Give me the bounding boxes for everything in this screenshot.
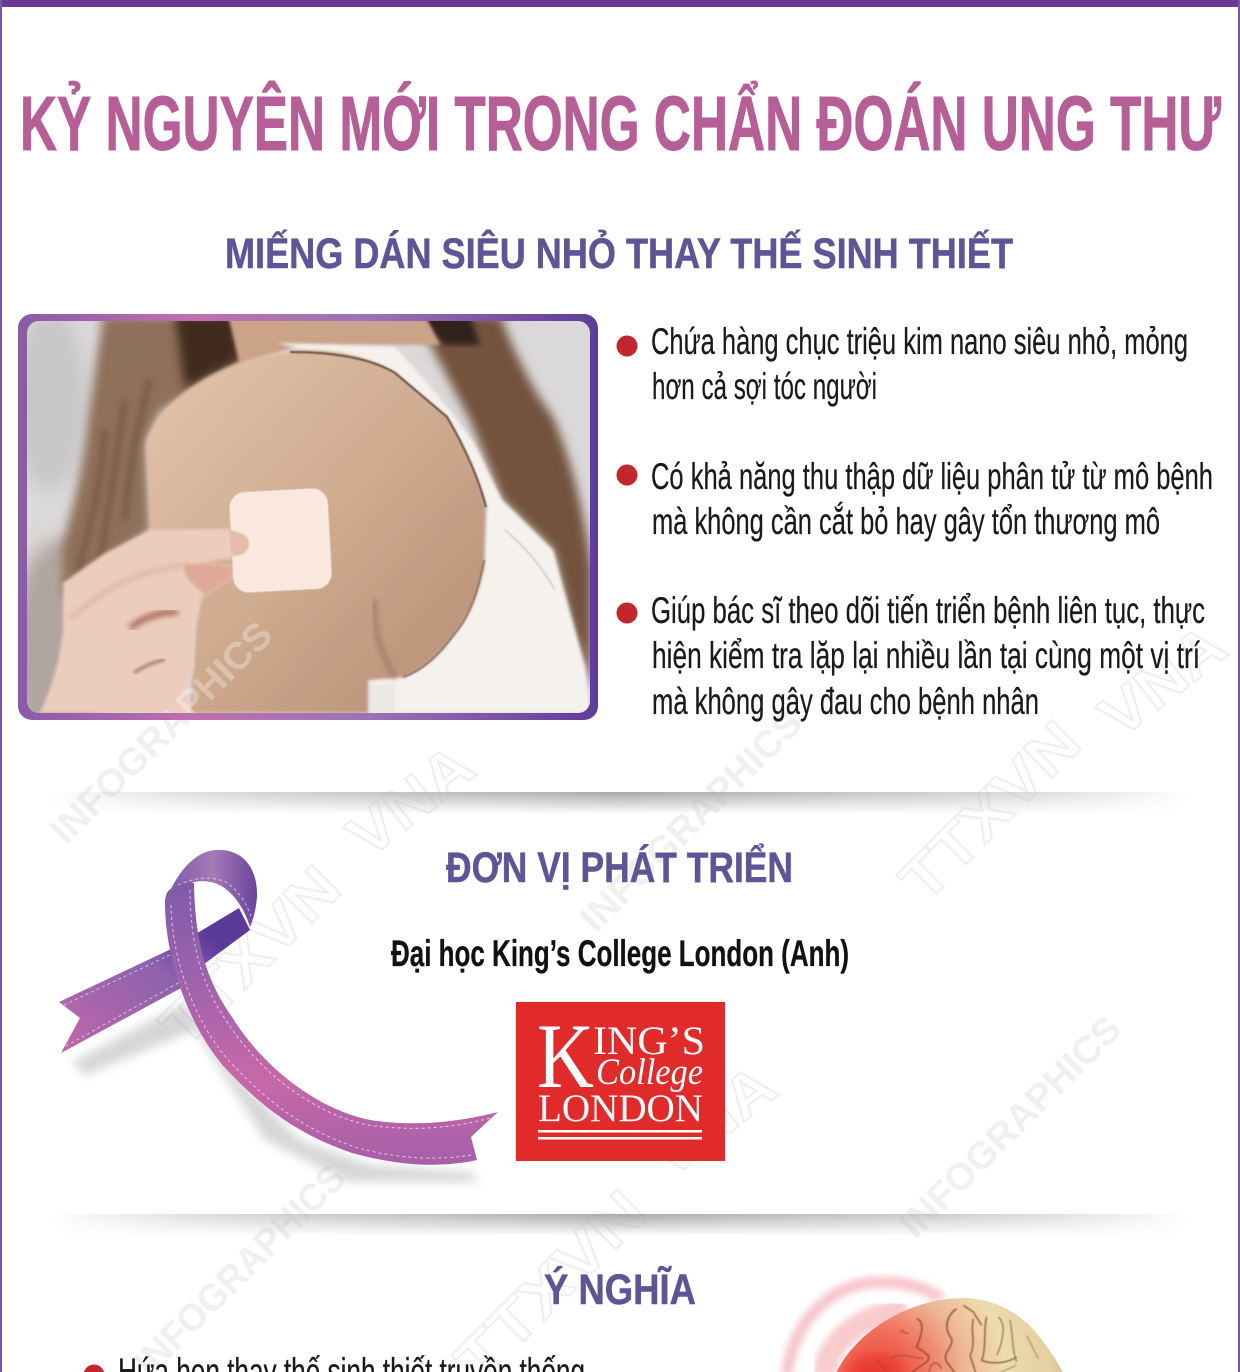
- watermarks: VNA: [637, 1051, 788, 1190]
- divider 1: [80, 792, 1158, 812]
- icon: purple awareness ribbon: [59, 850, 498, 1182]
- bullets: patch features: mà không gây đau cho bệnh nhân: [652, 681, 1039, 722]
- photo: patch on shoulder: [18, 314, 598, 720]
- top: [277, 343, 590, 713]
- watermarks: TTXVN: [147, 853, 353, 1059]
- heading: significance: Ý NGHĨA: [544, 1266, 696, 1314]
- patch: [228, 487, 333, 593]
- watermarks: INFOGRAPHICS: [573, 702, 811, 940]
- icon: brain with red glow: [787, 1282, 1064, 1372]
- bullets: patch features: hơn cả sợi tóc người: [652, 366, 877, 407]
- watermarks: TTXVN: [887, 708, 1093, 914]
- divider 2: [80, 1214, 1158, 1234]
- hand: [40, 529, 249, 713]
- logo: King's College London: K: [537, 1005, 594, 1107]
- logo: King's College London: LONDON: [538, 1087, 703, 1130]
- logo: King's College London: College: [596, 1052, 703, 1093]
- heading: developer: ĐƠN VỊ PHÁT TRIỂN: [446, 843, 793, 892]
- photo: patch on shoulder: INFOGRAPHICS: [43, 614, 281, 852]
- watermarks: INFOGRAPHICS: [892, 1008, 1130, 1246]
- heading: patch: MIẾNG DÁN SIÊU NHỎ THAY THẾ SINH THIẾT: [225, 229, 1013, 278]
- watermarks: [43, 611, 1238, 1372]
- logo: King's College London: [516, 1002, 725, 1161]
- watermarks: INFOGRAPHICS: [43, 614, 281, 852]
- developer name: Đại học King’s College London (Anh): [391, 933, 849, 974]
- bullets: patch features: [616, 321, 1213, 722]
- arm: [146, 350, 486, 713]
- watermarks: VNA: [1087, 611, 1238, 750]
- bullet: significance: [84, 1351, 585, 1372]
- logo: King's College London: ING’S: [593, 1018, 705, 1063]
- watermarks: VNA: [335, 731, 486, 870]
